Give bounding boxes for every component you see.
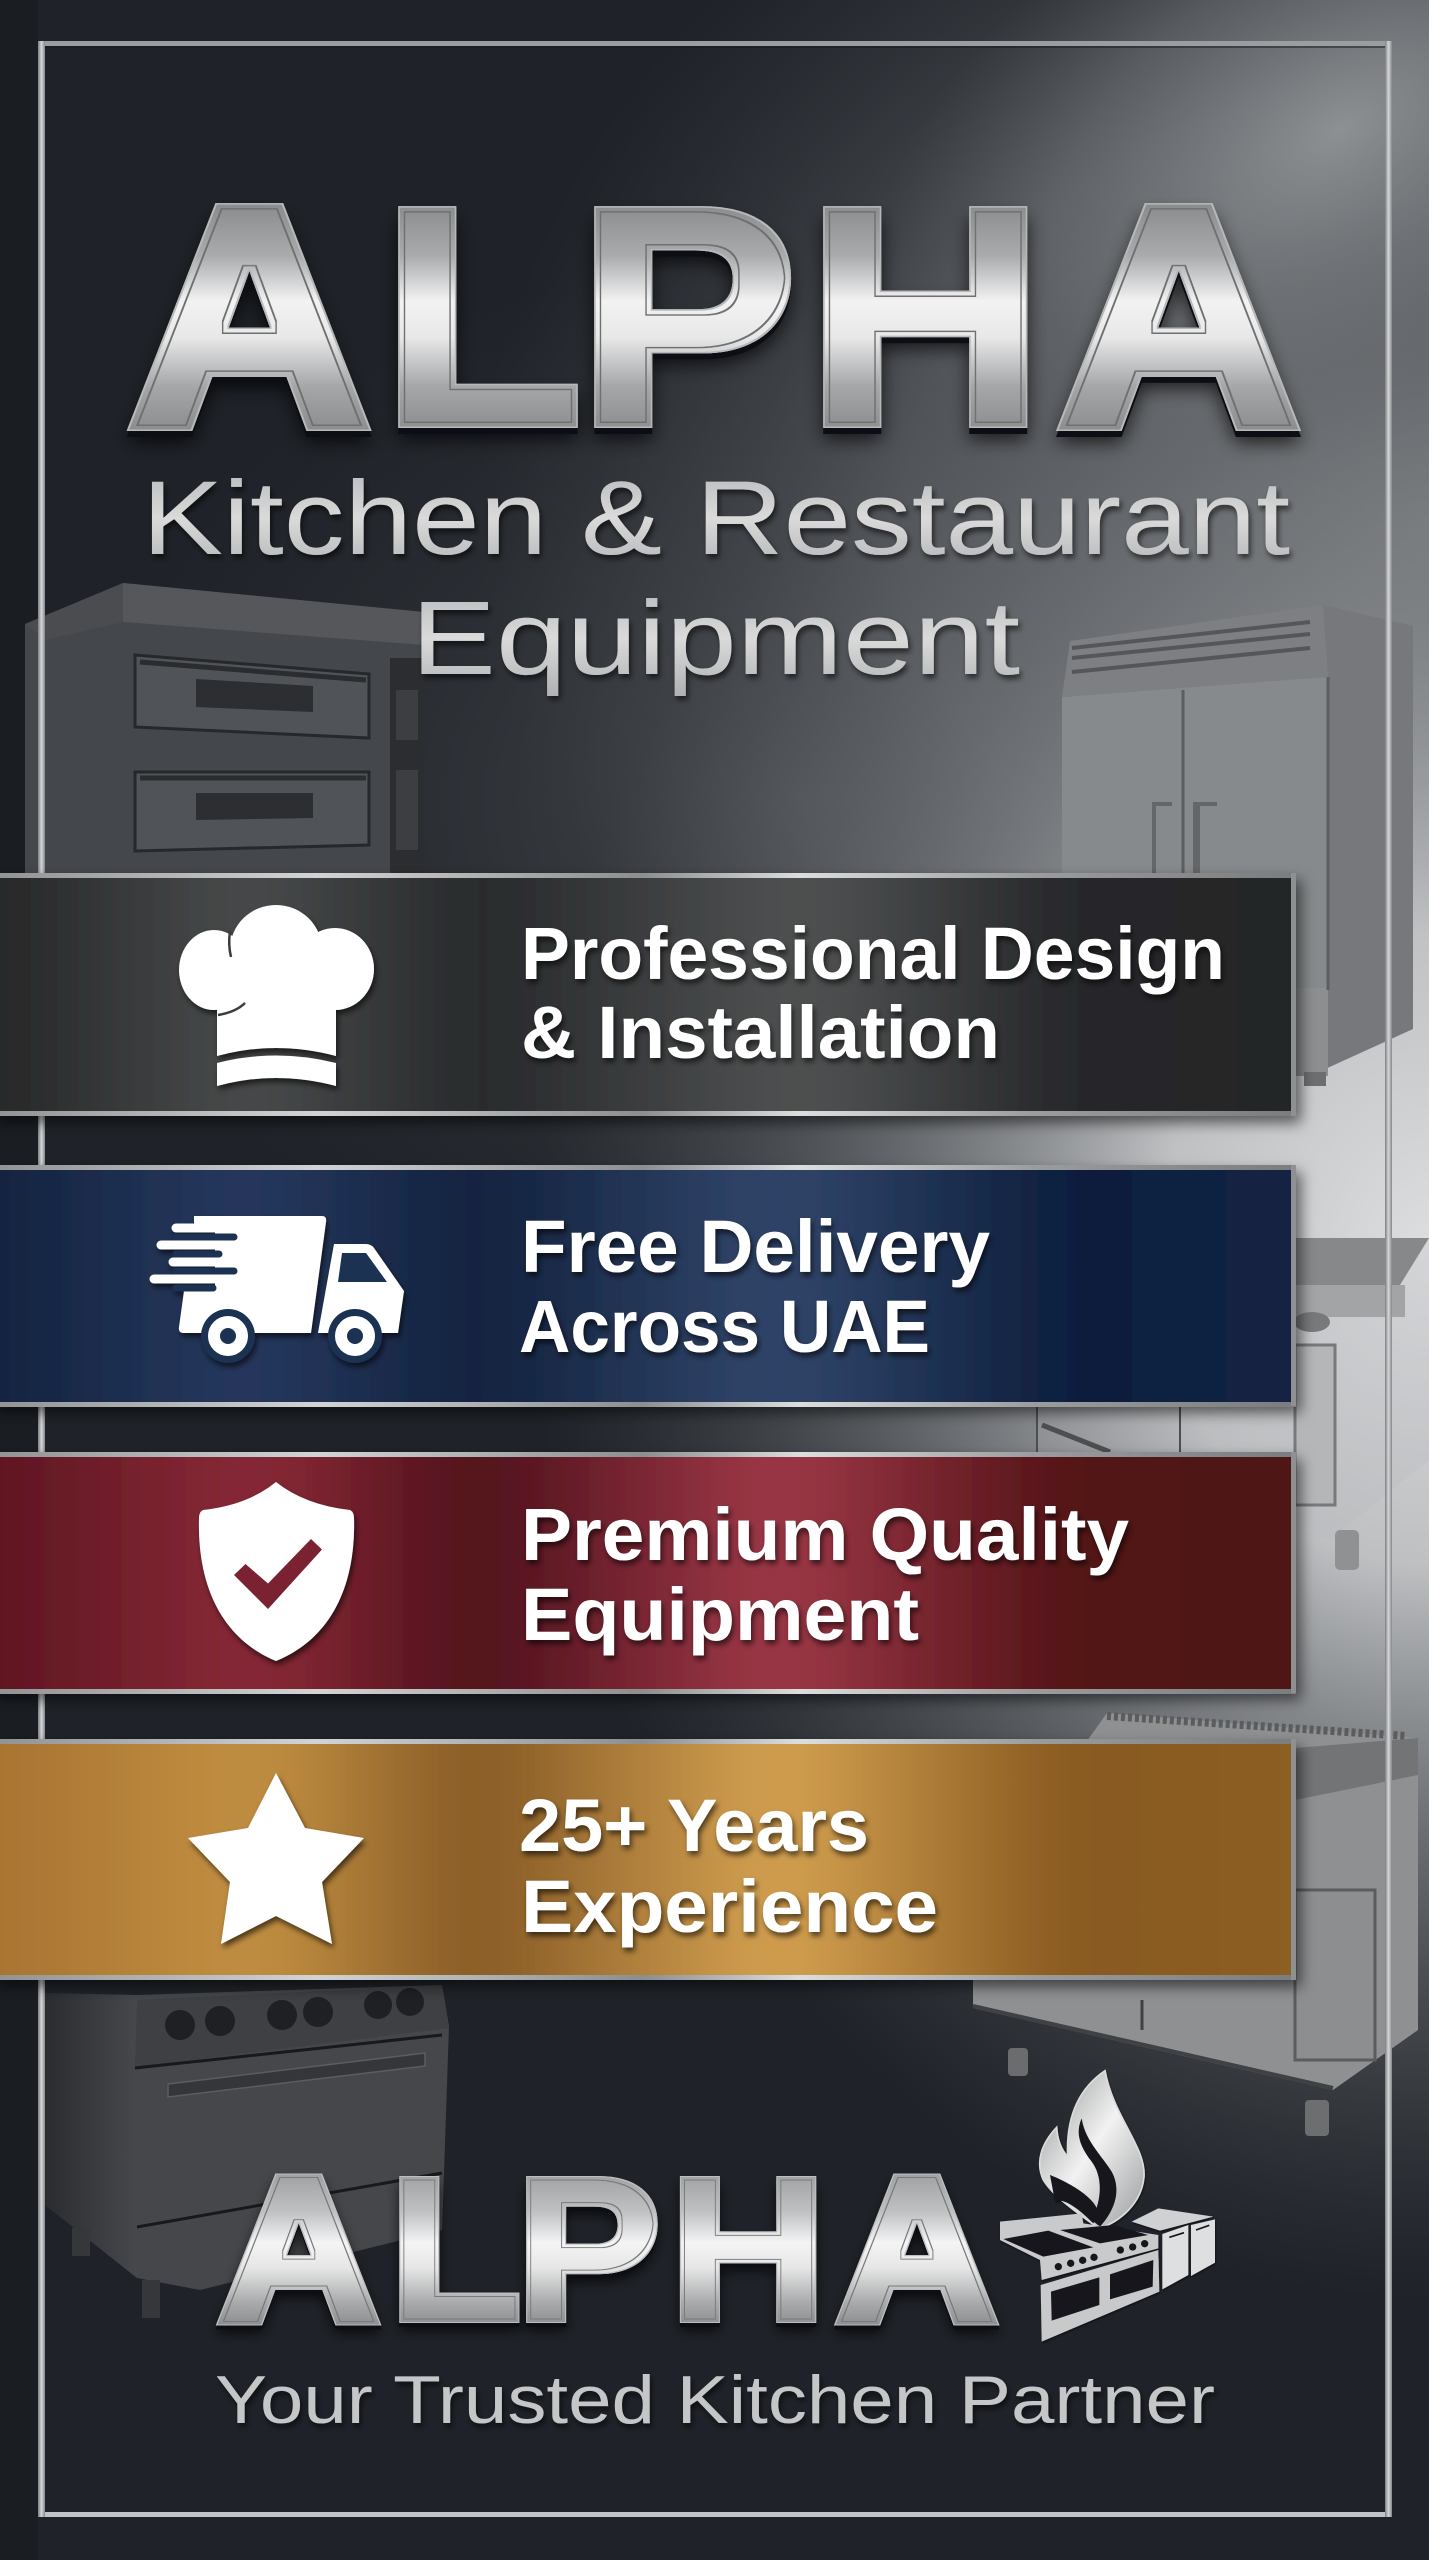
icon: delivery truck: [154, 1216, 404, 1363]
panel: free delivery: [0, 1165, 1429, 1407]
text: professional design line 1: Professional Design: [521, 912, 1225, 995]
range ovens: [1041, 2250, 1159, 2342]
icon: shield with check: [199, 1482, 354, 1661]
background equipment: char grill: [1037, 1238, 1429, 1570]
range top: [1000, 2213, 1158, 2280]
footer logo: ALPHA: ALPHA: [220, 2137, 995, 2362]
text: years line 1: 25+ Years: [519, 1784, 869, 1867]
background equipment: deck oven: [25, 583, 424, 875]
flame: [1040, 2071, 1144, 2228]
subtitle line 1: Kitchen & Restaurant: [142, 460, 1290, 577]
background equipment: gas range: [973, 1713, 1418, 2136]
background equipment: refrigerator: [1062, 605, 1413, 1086]
background equipment: oven range: [45, 1985, 449, 2318]
text: free delivery line 1: Free Delivery: [521, 1205, 990, 1288]
text: professional design line 2: & Installation: [521, 991, 1000, 1074]
text: free delivery line 2: Across UAE: [519, 1285, 930, 1368]
tagline: Your Trusted Kitchen Partner: [215, 2362, 1215, 2438]
icon: flame over kitchen range: [1000, 2071, 1215, 2342]
side cabinet: [1132, 2208, 1215, 2289]
panel: premium quality: [0, 1452, 1429, 1694]
icon: chef hat: [179, 905, 374, 1086]
text: years line 2: Experience: [521, 1865, 938, 1948]
text: premium quality line 1: Premium Quality: [521, 1493, 1129, 1576]
text: premium quality line 2: Equipment: [521, 1573, 919, 1656]
subtitle line 2: Equipment: [411, 580, 1020, 697]
icon: star: [188, 1773, 364, 1944]
panel: years of experience: [0, 1739, 1429, 1980]
panel: professional design: [0, 873, 1429, 1116]
title: ALPHA: ALPHA: [131, 145, 1298, 489]
